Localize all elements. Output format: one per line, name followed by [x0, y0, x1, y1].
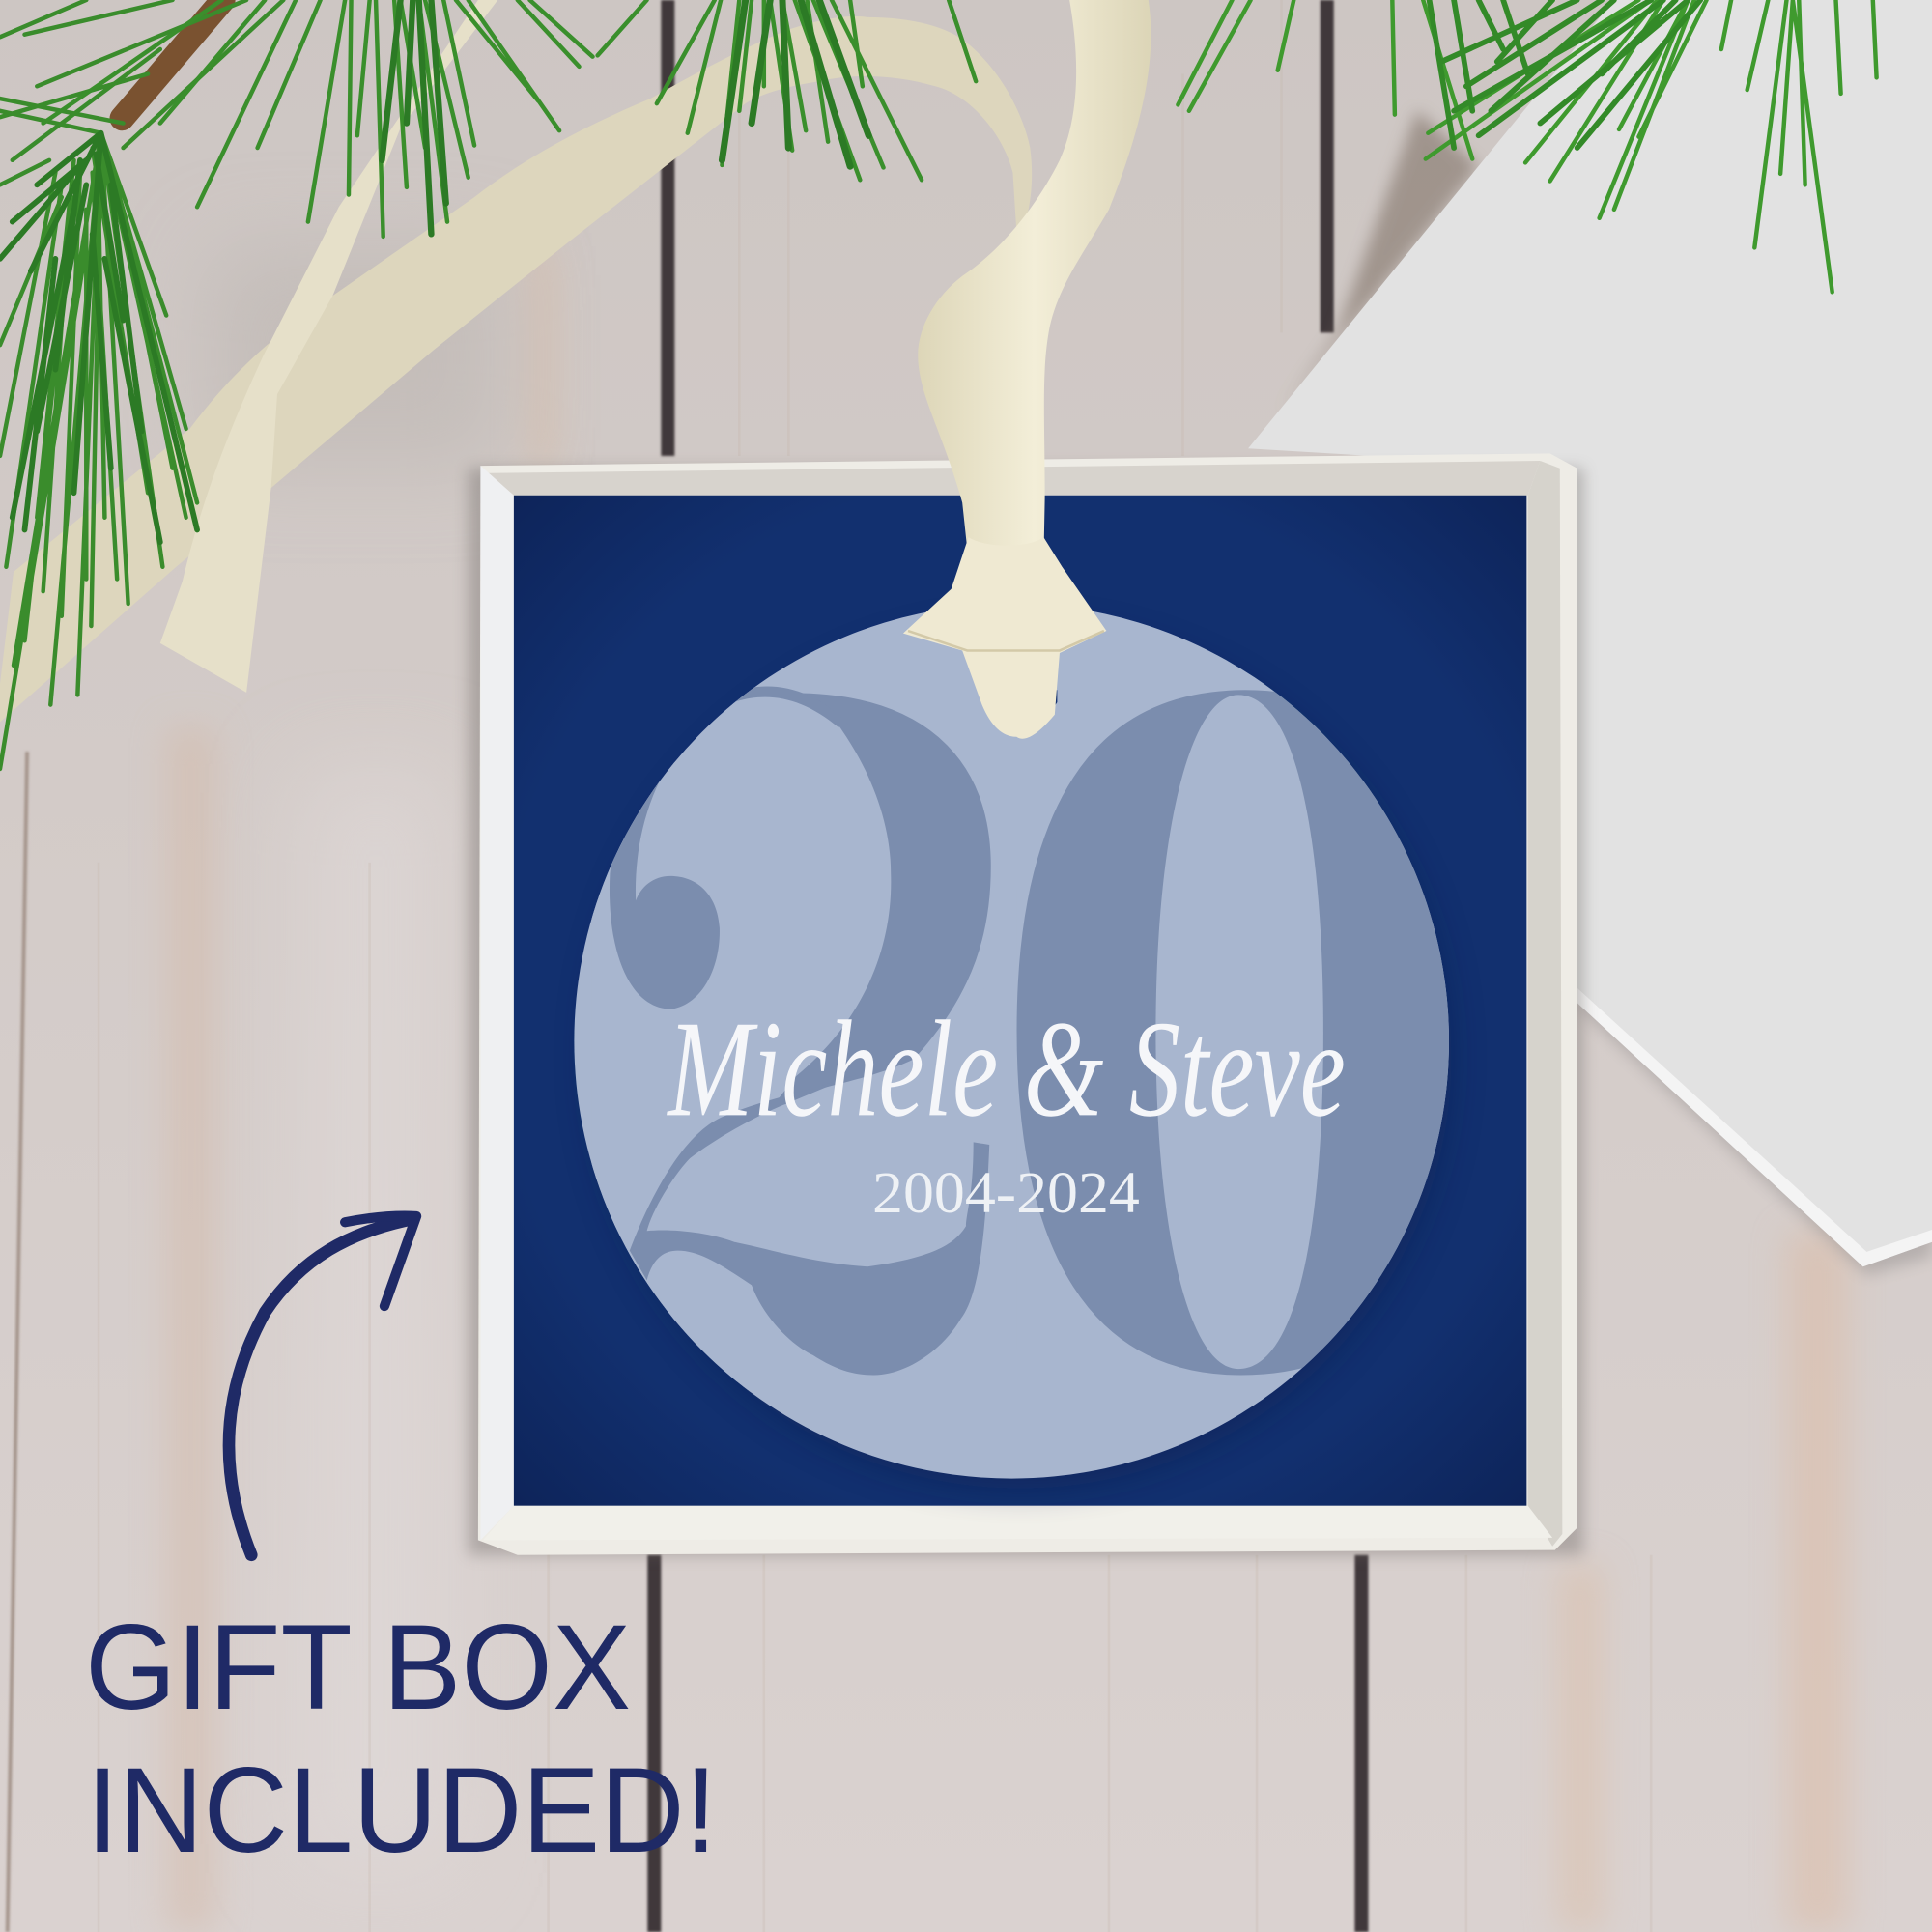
pine branch top right [1178, 0, 1877, 292]
caption [85, 1601, 717, 1878]
big number 20: 0 [976, 460, 1513, 1585]
big number 20 [591, 686, 1449, 1393]
round ornament [574, 611, 1451, 1511]
pine branch top centre [657, 0, 976, 180]
hanging hole [1005, 690, 1057, 736]
years: 2004-2024 [872, 1160, 1140, 1226]
caption: INCLUDED! [86, 1744, 717, 1878]
big number 20: 2 [594, 462, 1040, 1586]
ribbon narrow tail [160, 0, 497, 693]
pine branch top centre-left [43, 0, 647, 237]
navy insert card [514, 496, 1526, 1506]
satin ribbon loop and knot [903, 0, 1151, 739]
pine branch left [0, 0, 283, 769]
arrow pointing to the box [229, 1216, 416, 1555]
ribbon wide band [0, 16, 1032, 722]
gift box base [469, 453, 1583, 1555]
caption: GIFT BOX [85, 1601, 631, 1735]
white gift box lid [1248, 0, 1932, 1275]
names: Michele & Steve [667, 992, 1346, 1145]
